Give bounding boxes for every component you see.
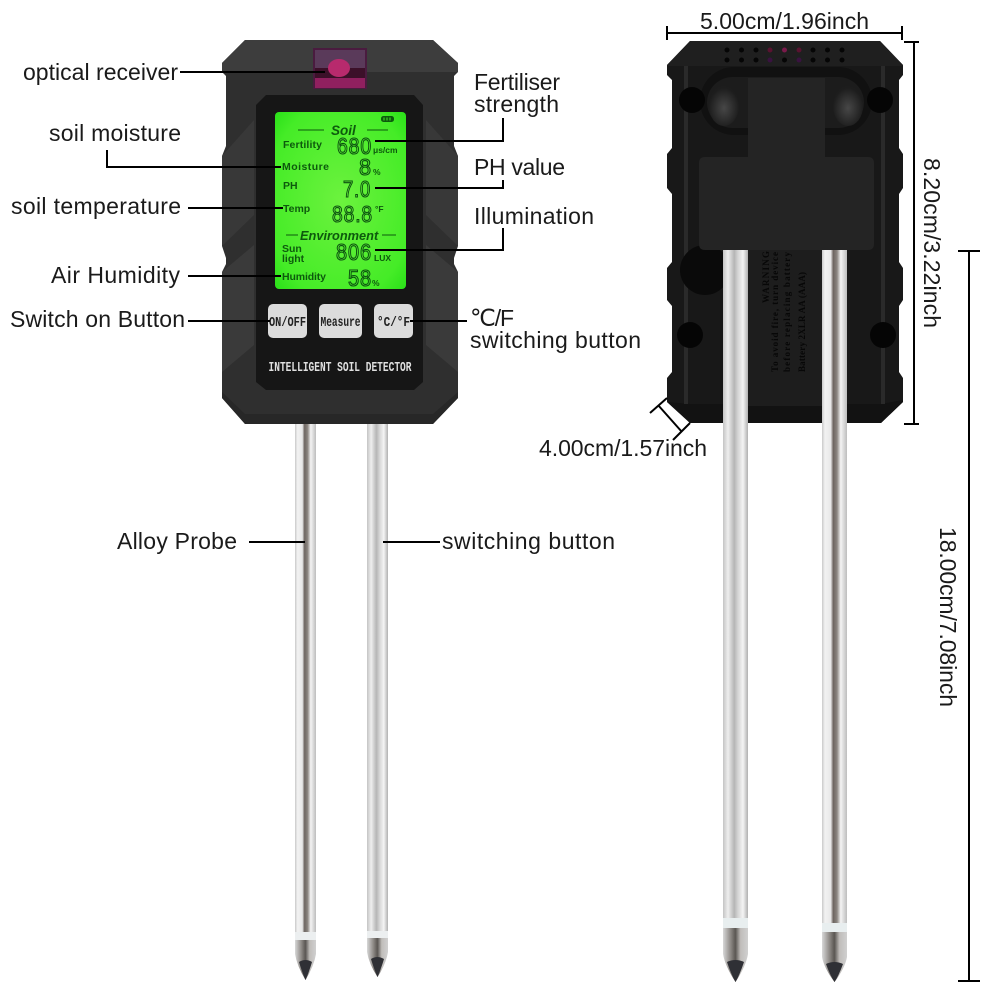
moisture reading: %: [373, 167, 381, 177]
front device body: [222, 40, 458, 424]
humidity reading: %: [372, 278, 380, 288]
PH reading: PH: [283, 180, 298, 192]
front device probes: [295, 424, 388, 980]
dimension: body height: 8.20cm/3.22inch: [919, 158, 945, 328]
callout: temperature switching button: switching button: [470, 327, 641, 353]
callout: switching button: switching button: [442, 528, 615, 554]
fertility reading: 680: [337, 133, 372, 159]
callout: temperature switching button: ℃/F: [470, 305, 514, 331]
callout: PH value: PH value: [474, 154, 565, 180]
callout: alloy probe: Alloy Probe: [117, 528, 237, 554]
dimension: body height: [904, 42, 945, 424]
ON/OFF button: ON/OFF: [269, 315, 306, 331]
back plate: [699, 78, 874, 250]
battery cover: [748, 250, 823, 406]
callout: soil temperature: soil temperature: [11, 193, 181, 219]
dimension: depth: [539, 398, 707, 461]
humidity reading: Humidity: [282, 271, 326, 283]
fertility reading: [283, 133, 398, 159]
back device: before replacing battery: [782, 252, 792, 372]
dimension: probe length: 18.00cm/7.08inch: [935, 527, 961, 707]
back body: [667, 41, 903, 423]
ON/OFF button: [268, 304, 307, 338]
warning text: WARNING: [761, 251, 771, 303]
callout: temperature switching button: [410, 305, 641, 353]
moisture reading: 8: [359, 154, 372, 180]
Measure button: Measure: [320, 315, 360, 331]
callout: PH value: [375, 154, 565, 188]
callout: soil moisture: soil moisture: [49, 120, 181, 146]
sunlight reading: [282, 239, 391, 265]
back right probe: [822, 250, 847, 982]
callout: fertiliser strength: Fertiliser: [474, 69, 560, 95]
temperature reading: Temp: [283, 203, 310, 215]
LCD screen: [275, 112, 406, 291]
back device: Battery 2XLR AA (AAA): [797, 272, 807, 372]
temperature unit button: [374, 304, 413, 338]
dimension: width: 5.00cm/1.96inch: [700, 8, 869, 34]
optical receiver window: [313, 48, 367, 89]
humidity reading: 58: [348, 265, 372, 291]
sunlight reading: 806: [336, 239, 372, 265]
back device: [667, 41, 903, 423]
sunlight reading: light: [282, 253, 305, 265]
temperature reading: 88.8: [332, 201, 373, 227]
callout: optical receiver: optical receiver: [23, 59, 178, 85]
dimension: width: [667, 8, 902, 40]
battery arc: [680, 245, 730, 295]
back left probe: [723, 250, 748, 982]
sunlight reading: LUX: [374, 253, 391, 263]
Measure button: [319, 304, 362, 338]
soil heading: [298, 123, 388, 138]
right front probe: [367, 424, 388, 977]
callout: fertiliser strength: [375, 69, 560, 141]
callout: air humidity: Air Humidity: [51, 262, 180, 288]
vent dots: [724, 48, 844, 62]
callout: illumination: Illumination: [474, 203, 594, 229]
moisture reading: [282, 154, 381, 180]
moisture reading: Moisture: [282, 161, 329, 173]
left front probe: [295, 424, 316, 980]
fertility reading: μs/cm: [373, 145, 398, 155]
environment heading: Environment: [300, 228, 379, 243]
humidity reading: [282, 265, 380, 291]
display bezel: [256, 95, 423, 390]
fertility reading: Fertility: [283, 139, 322, 151]
dimension: depth: 4.00cm/1.57inch: [539, 435, 707, 461]
temperature reading: [283, 201, 384, 227]
sunlight reading: Sun: [282, 243, 302, 255]
PH reading: 7.0: [343, 176, 371, 202]
product name: INTELLIGENT SOIL DETECTOR: [268, 360, 412, 376]
battery icon: [381, 116, 394, 122]
callout: illumination: [375, 203, 594, 250]
back screws: [677, 87, 896, 348]
back device: To avoid fire, turn device: [770, 252, 780, 372]
callout: soil moisture: [49, 120, 281, 167]
soil heading: Soil: [331, 123, 356, 138]
dimension: probe length: [935, 251, 980, 981]
callout: fertiliser strength: strength: [474, 91, 559, 117]
callout: switch on button: Switch on Button: [10, 306, 185, 332]
PH reading: [283, 176, 371, 202]
back probes: [723, 250, 847, 982]
sensor pill: [700, 67, 872, 135]
temperature reading: °F: [375, 204, 384, 214]
temperature unit button: °C/°F: [377, 315, 410, 331]
